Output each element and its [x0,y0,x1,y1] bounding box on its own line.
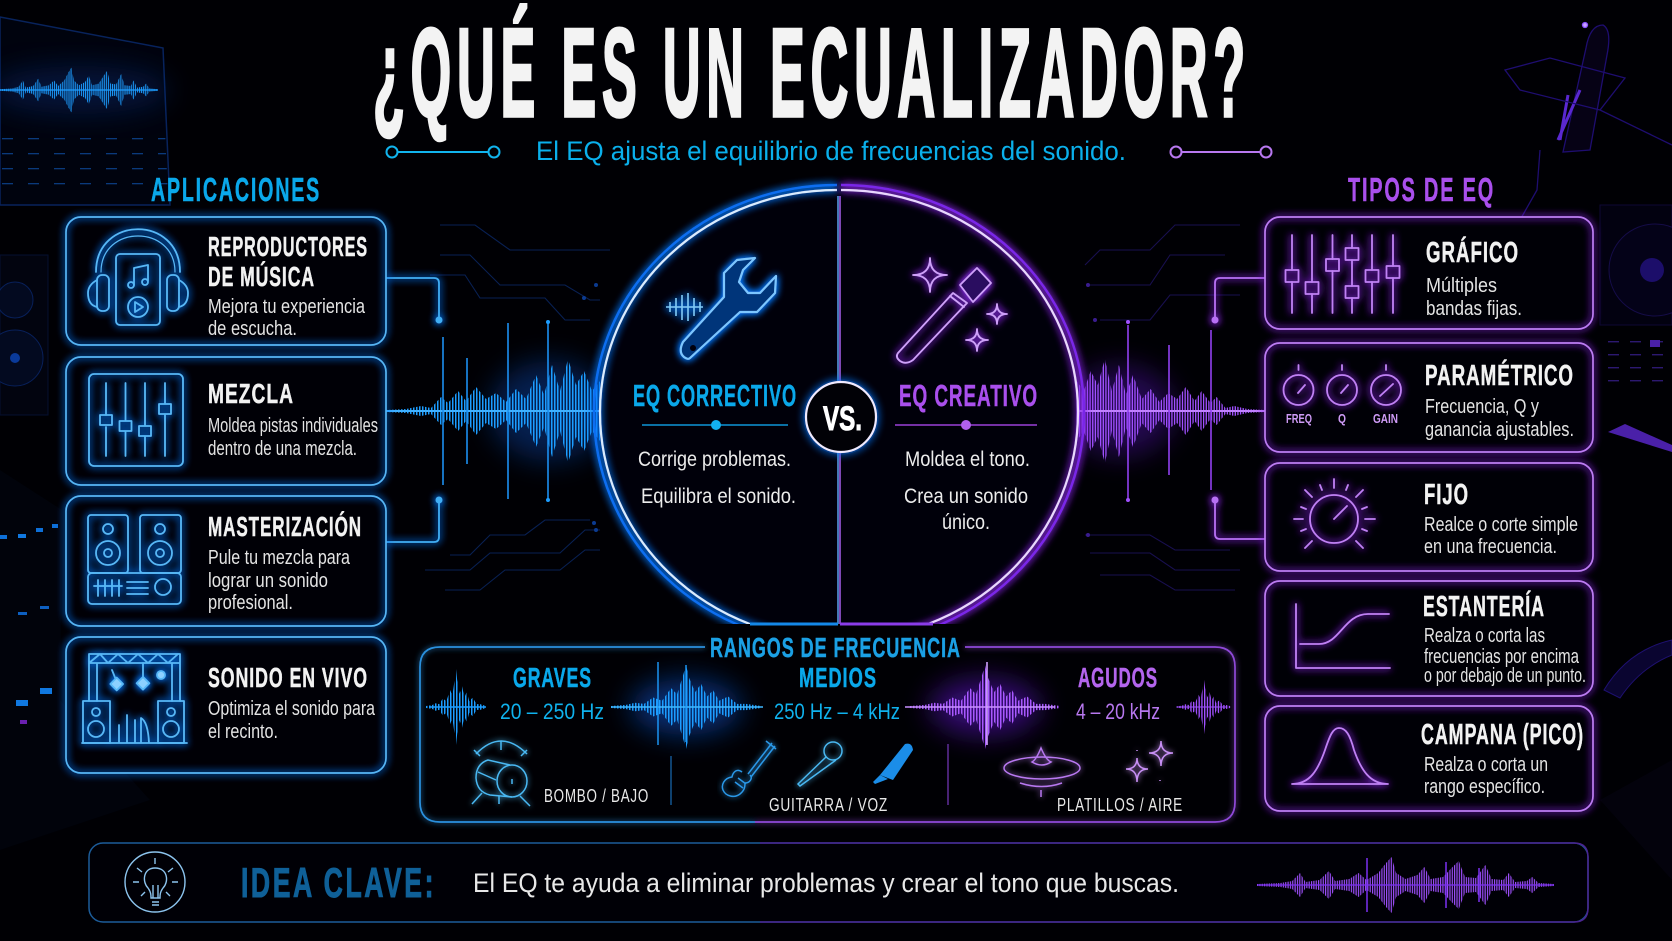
card: parametrico [1265,343,1593,452]
card: reproductores de musica: DE MÚSICA [208,261,315,292]
background: circuit traces [425,225,1240,590]
icon: sparkles [1126,741,1173,782]
connector: reproductores [386,278,442,324]
connector: masterizacion [386,496,442,542]
card: mezcla: dentro de una mezcla. [208,438,357,460]
card: estanteria: o por debajo de un punto. [1424,665,1586,687]
background: microphone [1505,22,1672,220]
card: mezcla: MEZCLA [208,378,294,409]
subtitle ornament left [386,146,500,158]
card: estanteria [1265,581,1593,696]
card: sonido en vivo [66,637,386,773]
card: reproductores de musica: Mejora tu experiencia [208,296,366,318]
card: reproductores de musica: REPRODUCTORES [208,231,368,262]
panel: aplicaciones cards [66,217,386,773]
card: campana: rango específico. [1424,776,1545,798]
main waveform left [386,320,610,502]
badge: vs [806,382,876,452]
icon: graphic eq sliders [1286,235,1400,313]
card: masterizacion: profesional. [208,592,293,614]
card: masterizacion: lograr un sonido [208,570,328,592]
label: guitarra voz: GUITARRA / VOZ [769,795,888,815]
label: medios: 250 Hz – 4 kHz [774,699,900,724]
card: reproductores de musica [66,217,386,345]
card: parametrico: Frecuencia, Q y [1425,396,1539,418]
text: creativo: Crea un sonido [904,485,1028,508]
waveform: graves small [426,669,486,745]
card: mezcla: Moldea pistas individuales [208,415,378,437]
background: studio monitor [0,17,170,205]
label: graves: 20 – 250 Hz [500,699,604,724]
icon: mixer faders [89,374,183,466]
icon: parametric knobs: Q [1338,411,1346,426]
label: medios: MEDIOS [799,662,877,693]
text: creativo: Moldea el tono. [905,448,1030,471]
text: correctivo [638,448,796,508]
heading: rangos de frecuencia: RANGOS DE FRECUENCIA [710,632,961,663]
background: mixing desk [0,470,150,850]
background: left speaker [0,255,48,415]
waveform: key idea [1257,857,1554,913]
icon: magic wand [897,258,1007,363]
icon: speakers and console [88,515,181,604]
card: parametrico: PARAMÉTRICO [1425,358,1574,392]
icon: light bulb [125,852,185,912]
label: agudos: 4 – 20 kHz [1076,699,1160,724]
card: fijo: Realce o corte simple [1424,514,1578,536]
card: grafico [1265,217,1593,329]
panel: eq circle [594,185,1084,645]
icon: wrench [681,258,776,359]
heading: idea clave: IDEA CLAVE: [241,859,436,906]
label: platillos aire: PLATILLOS / AIRE [1057,795,1183,815]
label: bombo bajo: BOMBO / BAJO [544,786,649,806]
connector: fijo [1212,496,1265,539]
circle divider [750,196,933,624]
heading: eq creativo: EQ CREATIVO [899,378,1038,413]
card: grafico: Múltiples [1426,275,1497,297]
waveform: medios [611,662,763,749]
card: masterizacion: MASTERIZACIÓN [208,511,362,542]
card: mezcla [66,357,386,485]
icon: microphone filled [873,744,913,784]
card: fijo [1265,463,1593,571]
card: masterizacion [66,496,386,626]
card: parametrico: ganancia ajustables. [1425,419,1574,441]
card: fijo: en una frecuencia. [1424,536,1557,558]
icon: parametric knobs: GAIN [1373,411,1398,426]
label: agudos: AGUDOS [1078,662,1158,693]
icon: cymbal [1004,748,1080,797]
label: agudos [1076,662,1160,724]
card: estanteria: Realza o corta las [1424,625,1545,647]
divider [670,756,672,805]
text: correctivo: Equilibra el sonido. [641,485,796,508]
heading: aplicaciones: APLICACIONES [151,171,321,208]
panel: tipos de eq cards [1265,217,1593,811]
card: reproductores de musica: de escucha. [208,318,297,340]
icon: parametric knobs: FREQ [1286,411,1312,426]
subtitle [386,136,1272,166]
circle left half [594,185,837,645]
icon: bass drum [472,741,530,806]
icon: fixed knob [1294,479,1375,548]
text: correctivo: Corrige problemas. [638,448,791,471]
subtitle ornament right [1170,146,1272,158]
icon: parametric knobs [1284,365,1401,426]
connector: grafico [1212,278,1265,324]
divider [947,744,949,805]
card: estanteria: frecuencias por encima [1424,646,1580,668]
panel frame [420,647,1235,822]
card: sonido en vivo: Optimiza el sonido para [208,698,376,720]
heading: tipos de eq: TIPOS DE EQ [1348,171,1495,208]
circle fill [602,378,1076,445]
heading: eq correctivo: EQ CORRECTIVO [633,378,797,413]
card: campana: Realza o corta un [1424,754,1548,776]
background: right speaker and rack [1600,205,1672,880]
main waveform right [1065,320,1265,502]
card: fijo: FIJO [1424,479,1469,511]
card: sonido en vivo: SONIDO EN VIVO [208,662,368,693]
icon: bell curve [1292,728,1388,784]
icon: stage [82,654,187,743]
subtitle: El EQ ajusta el equilibrio de frecuencias del sonido. [536,136,1126,166]
icon: shelf curve [1296,604,1390,668]
icon: headphones and player [88,229,188,325]
circle right half [841,185,1084,645]
badge: vs: VS. [823,400,862,438]
label: graves: GRAVES [513,662,592,693]
divider: creativo [895,420,1037,430]
card: grafico: GRÁFICO [1426,235,1519,269]
divider: correctivo [642,420,788,430]
panel: frequency ranges [420,632,1235,822]
label: medios [774,662,900,724]
panel: key idea [89,843,1588,922]
card: masterizacion: Pule tu mezcla para [208,547,351,569]
text: creativo: único. [942,511,990,534]
text: key idea: El EQ te ayuda a eliminar problemas y crear el tono que buscas. [473,868,1179,898]
label: graves [500,662,604,724]
icon: guitar [722,741,776,796]
card: sonido en vivo: el recinto. [208,721,278,743]
card: campana [1265,706,1593,811]
card: grafico: bandas fijas. [1426,298,1522,320]
waveform: agudos small [1176,680,1232,734]
icon: small sound wave [666,293,703,321]
waveform: agudos [905,662,1060,749]
card: estanteria: ESTANTERÍA [1423,589,1545,623]
icon: microphone outline [798,742,842,786]
connectors [386,278,1265,542]
text: creativo [904,448,1030,534]
